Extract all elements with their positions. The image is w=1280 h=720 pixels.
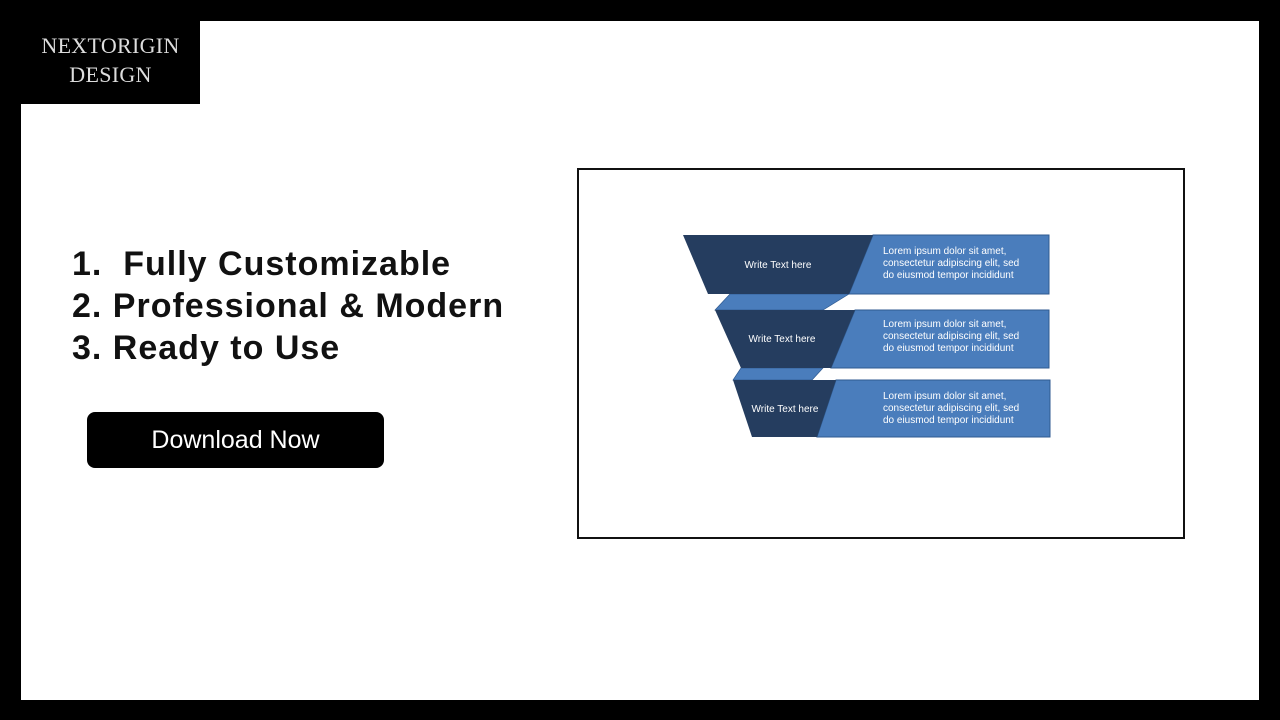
feature list [72, 245, 504, 367]
row 3 [733, 380, 1050, 437]
row 1: Lorem ipsum dolor sit amet, [883, 246, 1006, 257]
row 1: consectetur adipiscing elit, sed [883, 258, 1019, 269]
row 3: do eiusmod tempor incididunt [883, 415, 1014, 426]
row 1: Write Text here [745, 260, 812, 271]
feature list: 1. Fully Customizable [72, 245, 451, 283]
download button [87, 412, 384, 468]
logo [21, 21, 200, 104]
row 3: Write Text here [752, 404, 819, 415]
row 3: consectetur adipiscing elit, sed [883, 403, 1019, 414]
row 1: do eiusmod tempor incididunt [883, 270, 1014, 281]
row 1 [683, 235, 1049, 294]
download button: Download Now [151, 426, 320, 454]
slide preview panel [577, 168, 1185, 539]
row 3: Lorem ipsum dolor sit amet, [883, 391, 1006, 402]
row 2: Write Text here [749, 334, 816, 345]
connector bands [715, 294, 849, 380]
row 2: Lorem ipsum dolor sit amet, [883, 319, 1006, 330]
row 2: do eiusmod tempor incididunt [883, 343, 1014, 354]
row 2: consectetur adipiscing elit, sed [883, 331, 1019, 342]
feature list: 3. Ready to Use [72, 329, 340, 367]
feature list: 2. Professional & Modern [72, 287, 504, 325]
logo: NEXTORIGIN [41, 33, 180, 58]
row 2 [715, 310, 1049, 368]
logo: DESIGN [69, 62, 152, 87]
